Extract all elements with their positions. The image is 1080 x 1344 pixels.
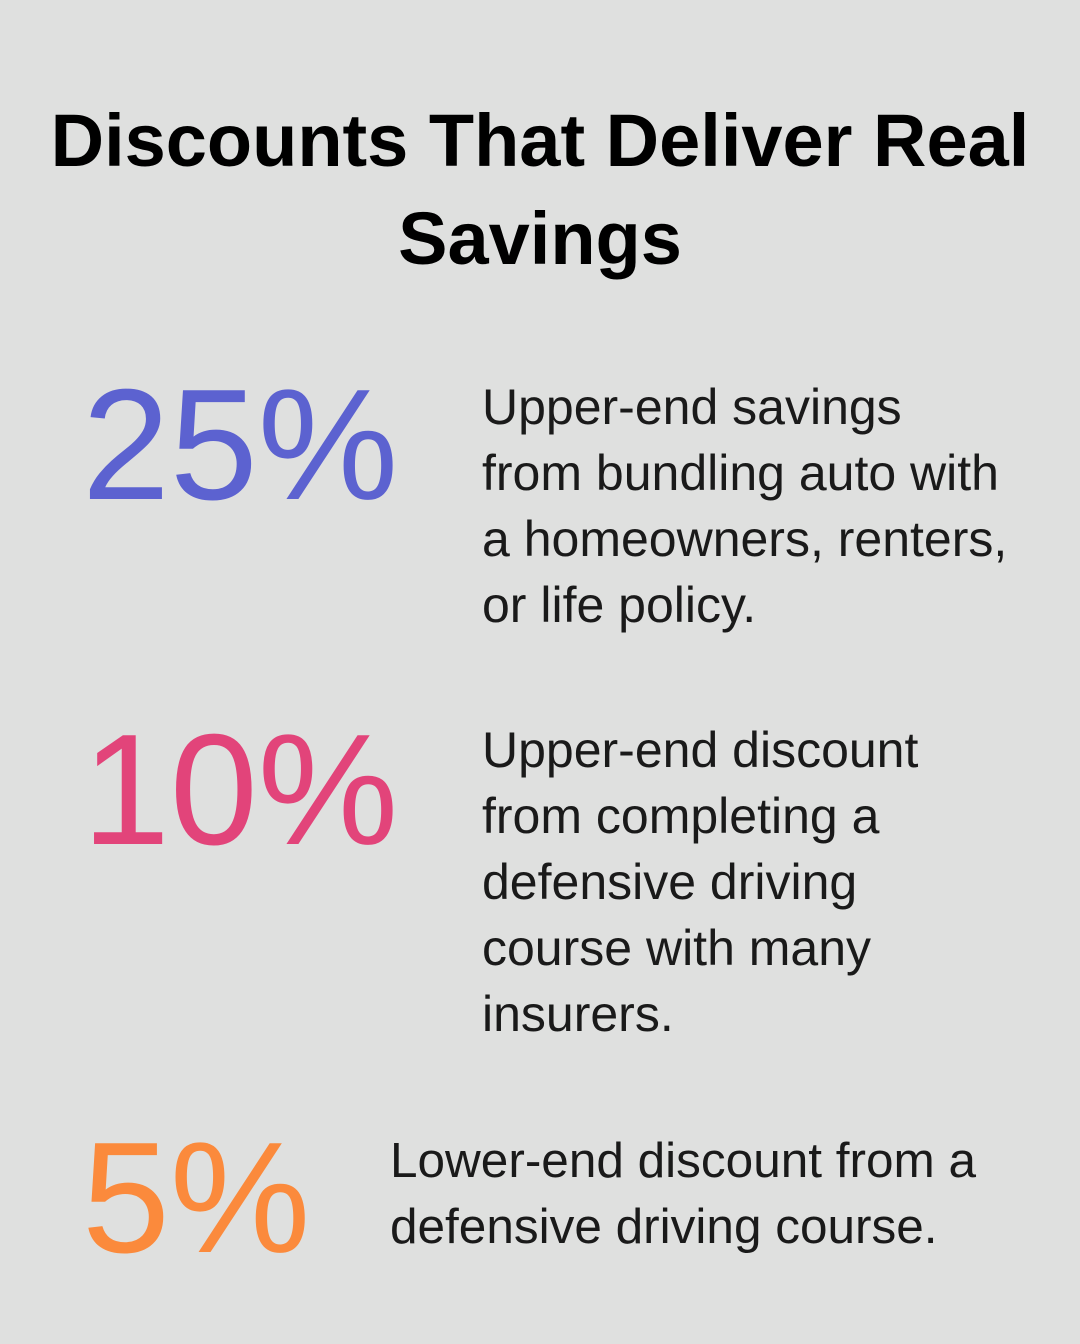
stat: 5%: 5% (82, 1110, 310, 1286)
title: Discounts That Deliver Real (51, 99, 1029, 182)
text: 25% description: Upper-end savings (482, 379, 902, 435)
text: 10% description: from completing a (482, 788, 879, 844)
title: Savings (398, 197, 682, 280)
stat: 10%: 10% (82, 702, 398, 878)
text: 5% description (390, 1133, 976, 1254)
text: 10% description: defensive driving (482, 854, 857, 910)
text: 10% description: insurers. (482, 986, 674, 1042)
text: 10% description: Upper-end discount (482, 722, 918, 778)
text: 5% description: Lower-end discount from a (390, 1133, 976, 1188)
text: 25% description: from bundling auto with (482, 445, 999, 501)
text: 10% description: course with many (482, 920, 871, 976)
stat: 25%: 25% (82, 357, 398, 533)
text: 10% description (482, 722, 918, 1042)
text: 25% description: a homeowners, renters, (482, 511, 1007, 567)
text: 5% description: defensive driving course. (390, 1199, 938, 1254)
text: 25% description (482, 379, 1007, 633)
title (51, 99, 1029, 280)
text: 25% description: or life policy. (482, 577, 756, 633)
